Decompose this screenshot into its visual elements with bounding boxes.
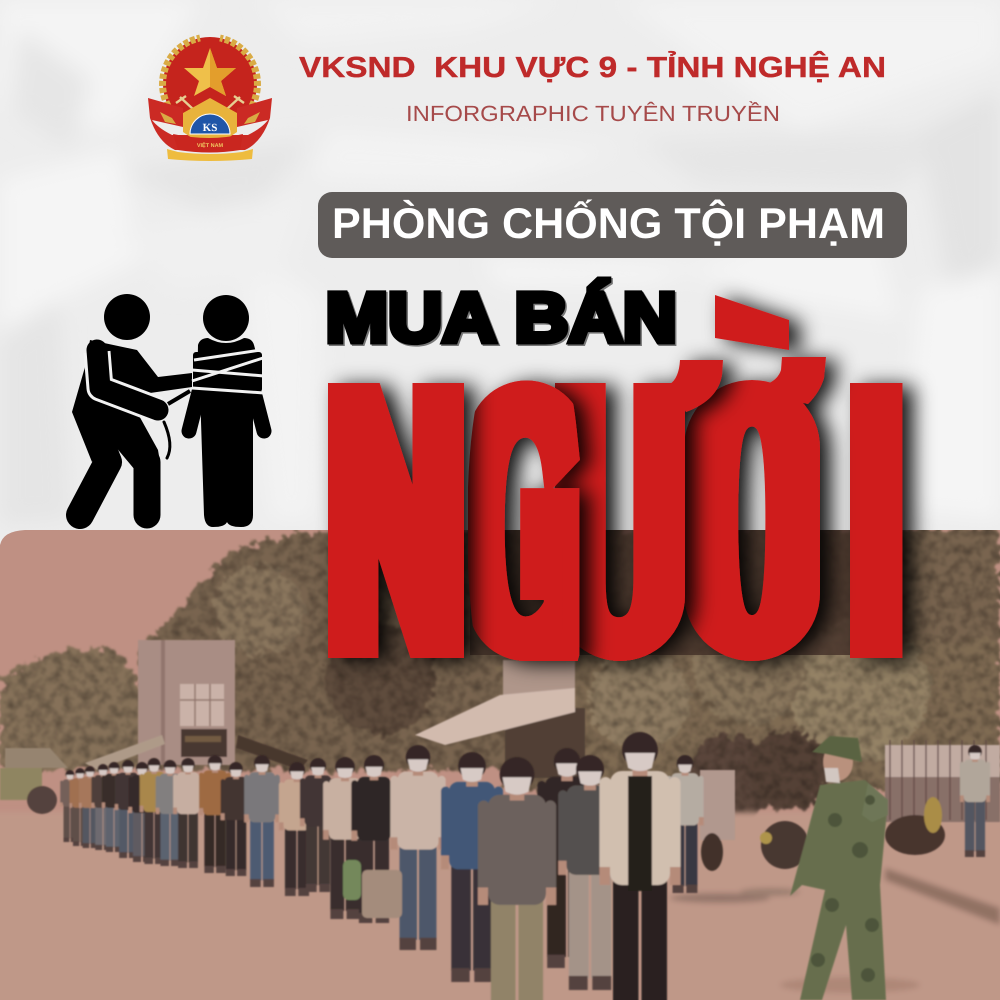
photo people queue (60, 732, 990, 1000)
ropes (192, 350, 264, 393)
letter G: G (470, 252, 580, 806)
emblem swords (176, 96, 244, 110)
icon: trafficker binding victim (72, 294, 264, 527)
letter I: I (851, 337, 901, 707)
letter Ờ with horn and grave (684, 286, 852, 678)
letter N: N (328, 337, 463, 707)
photo trees (0, 530, 1000, 825)
right figure (189, 295, 264, 527)
left figure (72, 294, 192, 515)
photo soldier (790, 736, 888, 1000)
emblem star (184, 48, 236, 96)
heading: NGƯỜI (322, 286, 930, 680)
emblem gold plate (183, 98, 237, 138)
photo buildings (0, 640, 1000, 871)
emblem ribbons (148, 98, 272, 150)
photo dark band behind heading (470, 530, 850, 655)
header: subtitle: INFORGRAPHIC TUYÊN TRUYỀN (406, 101, 780, 126)
emblem red banner (173, 134, 243, 152)
letter Ư with horn: Ư (556, 314, 704, 784)
emblem wheat wreath (163, 38, 257, 106)
photo tint overlay (0, 530, 1000, 1000)
background: crumpled paper (0, 0, 1000, 540)
emblem gold base (167, 149, 253, 161)
photo: detainees queue with soldier (0, 530, 1000, 1000)
heading: MUA BÁN: MUA BÁN (327, 280, 678, 358)
heading: MUA BÁN: MUA BÁN (326, 279, 677, 357)
letter Ờ with horn and grave: Ờ (691, 104, 826, 944)
header: organisation name: VKSND KHU VỰC 9 - TỈNH NGHỆ AN (299, 51, 886, 84)
emblem: Vietnam procuracy crest: VIỆT NAM (197, 142, 224, 149)
emblem gear with KS (190, 114, 230, 134)
title pill (318, 192, 907, 258)
photo ground (671, 808, 1000, 993)
title pill: PHÒNG CHỐNG TỘI PHẠM (332, 199, 885, 248)
emblem: Vietnam procuracy crest (148, 37, 272, 161)
emblem: Vietnam procuracy crest: KS (203, 122, 217, 134)
letter Ư with horn (554, 346, 749, 678)
